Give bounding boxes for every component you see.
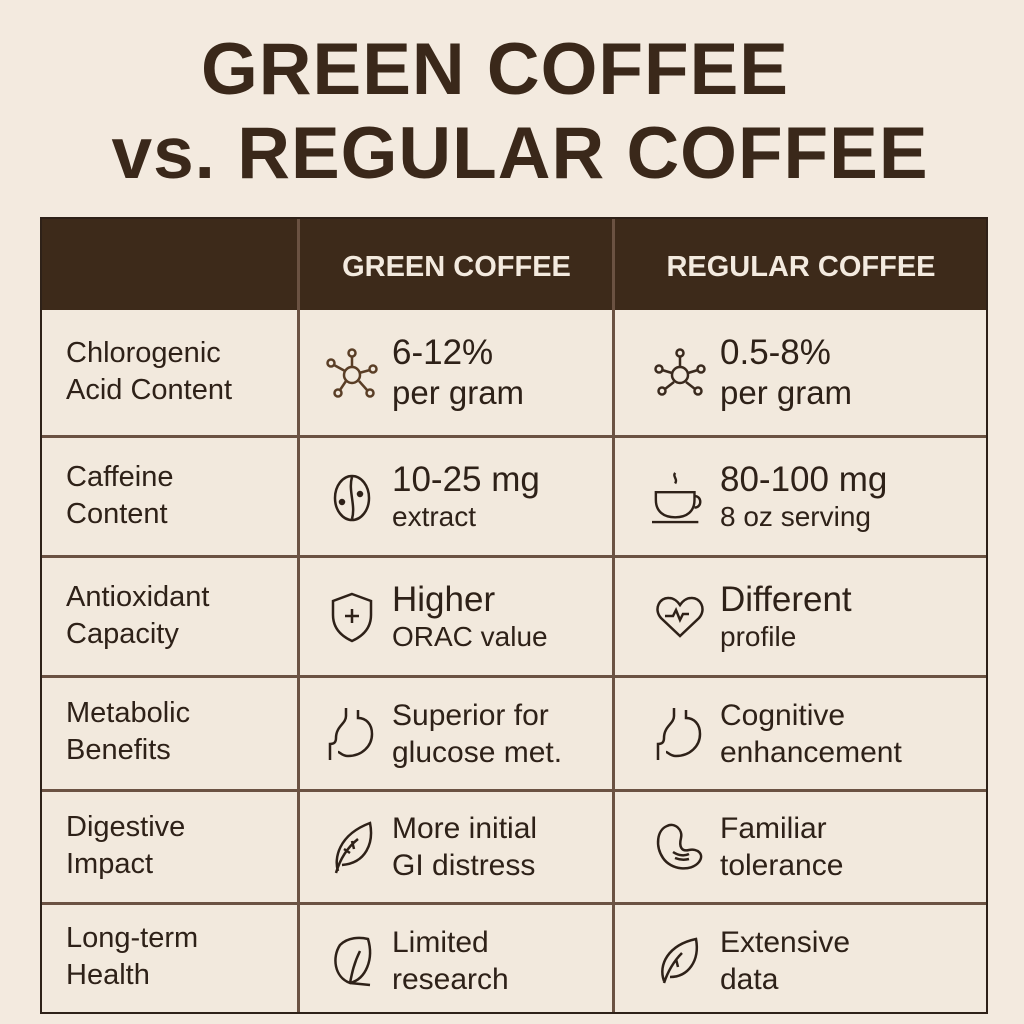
green: caffeine: 10-25 mg [392,460,540,498]
comparison table: Antioxidant [66,581,210,613]
green: antioxidant: Higher [392,580,495,618]
green: long-term [334,926,509,996]
regular: long-term: Extensive [720,926,850,958]
title: vs. REGULAR COFFEE [111,113,929,194]
comparison table: Capacity [66,618,179,650]
comparison table: Digestive [66,811,185,843]
green: metabolic: Superior for [392,698,549,732]
row labels: Acid Content [66,374,232,406]
regular: chlorogenic: 0.5-8% [720,332,831,372]
row labels [66,337,232,406]
regular: caffeine [652,460,887,532]
green: metabolic: glucose met. [392,736,562,768]
regular: long-term [661,926,850,996]
comparison table: Health [66,959,150,991]
header: regular coffee: REGULAR COFFEE [666,251,936,283]
regular: antioxidant: Different [720,580,852,618]
comparison table: Impact [66,848,153,880]
header row [42,219,986,310]
regular: caffeine: 8 oz serving [720,500,871,532]
comparison table: Content [66,498,168,530]
green: chlorogenic: 6-12% [392,332,493,372]
green: digestive [334,812,537,882]
regular: digestive: tolerance [720,849,843,882]
green: chlorogenic: per gram [392,374,524,410]
green: antioxidant [332,580,548,652]
green: metabolic [328,698,562,768]
regular: metabolic [656,698,902,768]
title [111,29,929,194]
green: chlorogenic [326,332,524,411]
comparison table: Caffeine [66,461,174,493]
regular: digestive [656,812,843,882]
comparison table: Long-term [66,922,198,954]
regular: digestive: Familiar [720,812,827,845]
regular: metabolic: Cognitive [720,698,845,732]
regular: antioxidant: profile [720,620,796,652]
comparison table [40,217,988,1014]
comparison table: Benefits [66,734,171,766]
regular: antioxidant [656,580,852,652]
row labels: Chlorogenic [66,337,221,369]
green: caffeine [334,460,540,532]
regular: metabolic: enhancement [720,736,902,768]
green: caffeine: extract [392,500,476,532]
green: long-term: research [392,962,509,996]
green: digestive: More initial [392,812,537,845]
title: GREEN COFFEE [201,29,789,110]
regular: chlorogenic: per gram [720,374,852,410]
regular: caffeine: 80-100 mg [720,460,887,498]
green: antioxidant: ORAC value [392,620,548,652]
comparison table: Metabolic [66,697,190,729]
regular: chlorogenic [654,332,852,411]
header: green coffee: GREEN COFFEE [342,251,571,283]
green: long-term: Limited [392,926,489,958]
green: digestive: GI distress [392,849,535,882]
regular: long-term: data [720,962,778,996]
